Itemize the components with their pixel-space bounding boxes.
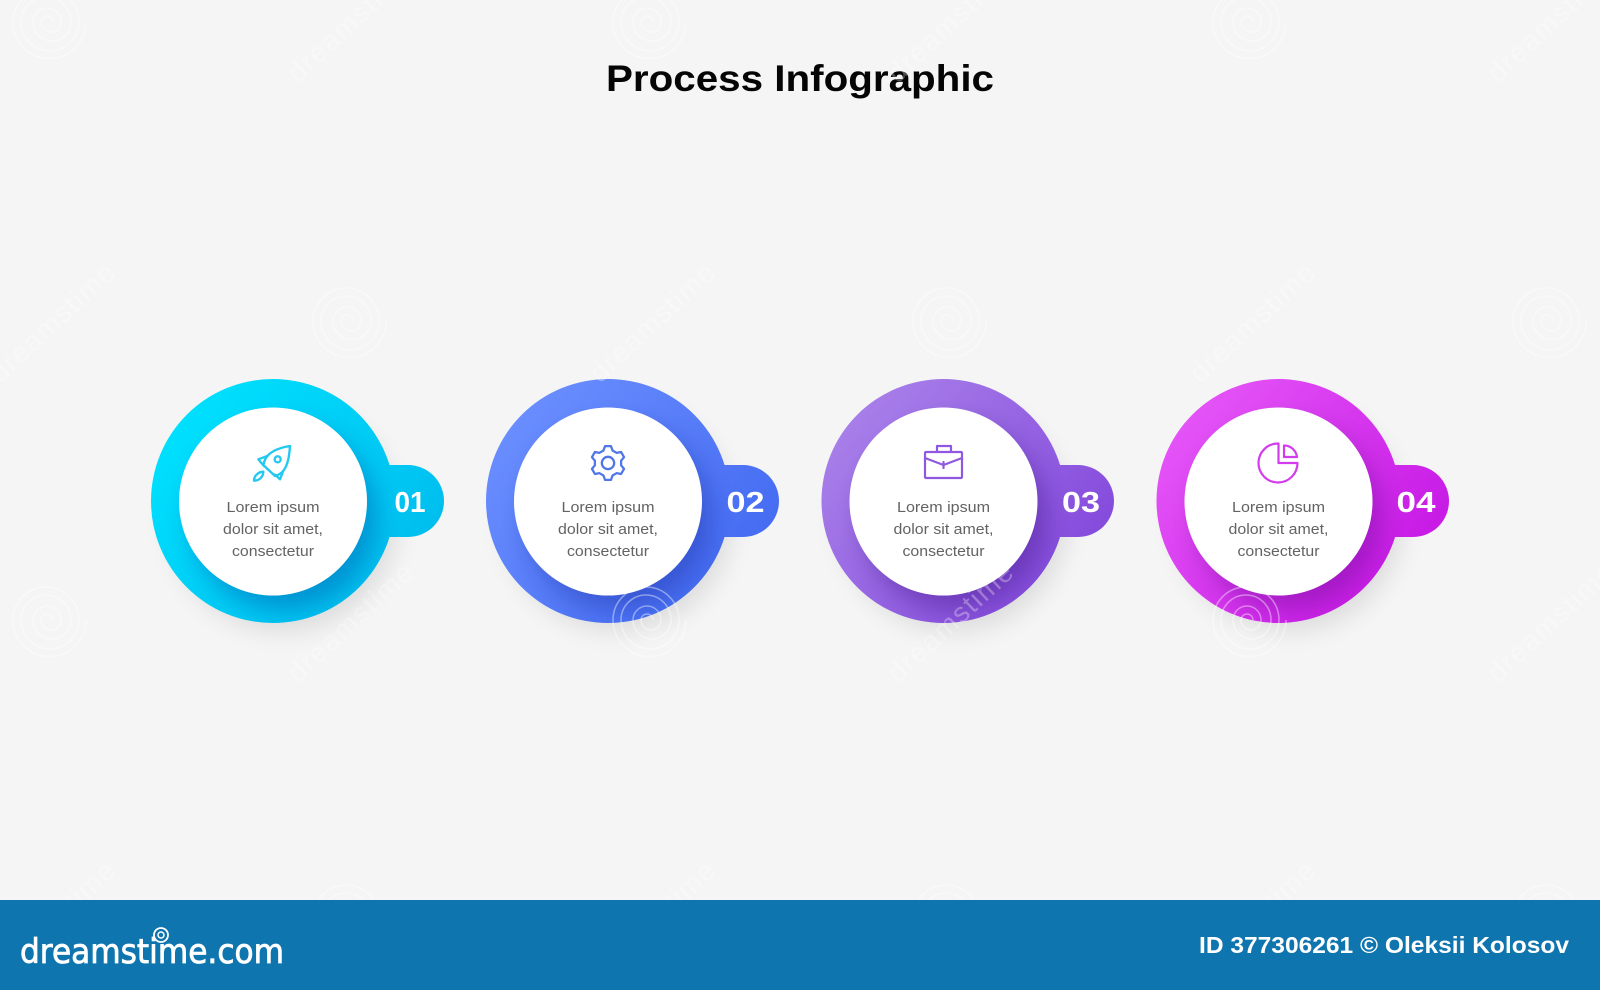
step 1 text: Lorem ipsum xyxy=(226,499,320,516)
step 4 text: Lorem ipsum xyxy=(1232,499,1325,516)
icon: gear xyxy=(592,446,624,480)
image id and credit: ID 377306261 © Oleksii Kolosov xyxy=(1199,932,1569,958)
dreamstime logo: dreamstime.com xyxy=(20,932,284,972)
step 3 text: Lorem ipsum xyxy=(897,499,990,516)
icon: briefcase xyxy=(925,446,962,478)
step 2 text: Lorem ipsum xyxy=(562,499,654,516)
watermark pattern: dreamstime xyxy=(281,557,419,688)
step 2 text xyxy=(558,499,658,560)
step 3: purple circle xyxy=(822,379,1114,631)
step 4 number: 04 xyxy=(1396,487,1436,519)
watermark pattern: dreamstime xyxy=(1183,855,1321,986)
watermark pattern: dreamstime xyxy=(583,855,721,986)
step 4 text xyxy=(1228,499,1328,560)
footer bar xyxy=(0,900,1600,990)
step 3 number: 03 xyxy=(1062,487,1100,519)
step 2 text: dolor sit amet, xyxy=(558,521,658,538)
icon: rocket xyxy=(254,446,290,481)
step 1 text: consectetur xyxy=(232,543,314,560)
step 2 text: consectetur xyxy=(567,543,649,560)
step 4: magenta circle xyxy=(1156,379,1449,631)
step 4 text: consectetur xyxy=(1238,543,1320,560)
step 1: cyan circle xyxy=(151,379,444,631)
step 3 text: dolor sit amet, xyxy=(894,521,994,538)
step 4 text: dolor sit amet, xyxy=(1228,521,1328,538)
step 1 text: dolor sit amet, xyxy=(223,521,323,538)
step 3 text: consectetur xyxy=(902,543,984,560)
watermark pattern: dreamstime xyxy=(881,557,1019,688)
step 1 number: 01 xyxy=(394,487,426,519)
step 1 text xyxy=(223,499,323,560)
watermark pattern: dreamstime xyxy=(583,257,721,388)
title: Process Infographic xyxy=(606,58,994,99)
icon: pie chart xyxy=(1259,443,1298,482)
step 2: blue circle xyxy=(486,379,779,631)
watermark pattern: dreamstime xyxy=(1183,257,1321,388)
step 3 text xyxy=(894,499,994,560)
step 2 number: 02 xyxy=(726,487,764,519)
